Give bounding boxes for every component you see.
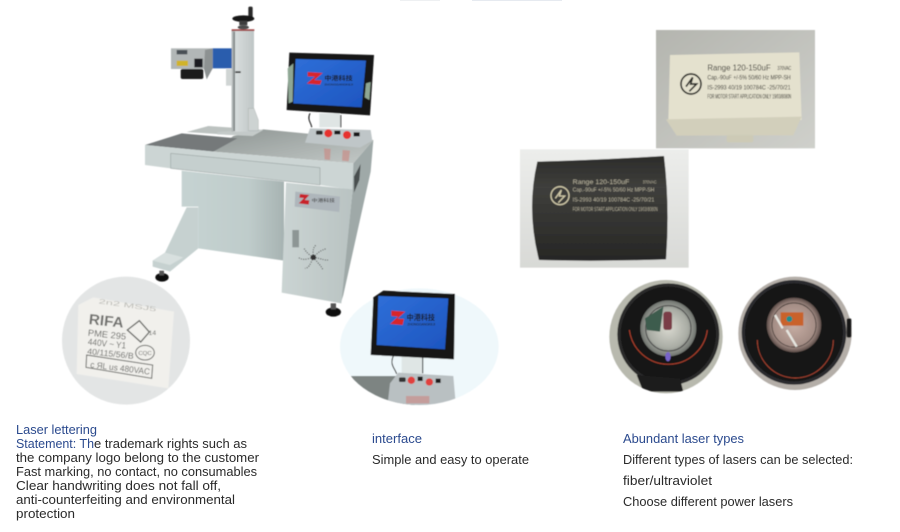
machine legs and lower body [153,171,341,317]
laser head [171,48,232,79]
feature: clear handwriting: Clear handwriting does not fall off, [16,478,221,493]
photo: beige capacitor with marking: Cap.-90uF +/-5% 50/60 Hz MPP-SH [707,75,791,81]
monitor: 中港科技 [324,74,353,82]
circular photo: interface close-up: 中港科技 [407,313,436,322]
photo: black capacitor with marking: 370VAC [643,179,657,184]
statement blue part: Statement: Th [16,436,94,451]
description: interface: Simple and easy to operate [372,452,529,467]
photo: black capacitor with marking [520,149,689,268]
circular photo: RIFA capacitor: PME 295 [87,328,127,342]
circular photo: RIFA capacitor: 2n2 MSJ5 [98,298,157,314]
photo: laser lens 2 [738,277,852,390]
cabinet logo plate: 中港科技 [312,197,335,204]
circular photo: RIFA capacitor: 440V ~ Y1 [87,337,127,351]
heading: laser lettering: Laser lettering [16,422,97,437]
photo: laser lens 1 [609,280,723,393]
photo: black capacitor with marking: Cap.-90uF +/-5% 50/60 Hz MPP-SH [573,187,654,193]
description: laser selection: Different types of lasers can be selected: [623,452,853,467]
photo: beige capacitor with marking: IS-2993 40/19 100784C -25/70/21 [707,85,791,91]
text block: interface [372,431,529,467]
description: laser kinds: fiber/ultraviolet [623,473,712,488]
handwheel [232,7,254,29]
heading: interface: interface [372,431,422,446]
photo: beige capacitor with marking: 370VAC [777,66,791,72]
feature: protection: protection [16,506,75,521]
photo: black capacitor with marking: Range 120-150uF [573,179,629,186]
vent [298,245,329,269]
control panel [305,128,372,148]
photo: beige capacitor with marking [656,30,815,148]
circular photo: interface close-up [340,288,499,410]
faint top edge marks [400,0,562,1]
circular photo: RIFA capacitor: 14 [149,330,156,337]
cabinet [282,140,373,303]
feature: anti-counterfeiting: anti-counterfeiting and environmental [16,492,235,507]
photo: black capacitor with marking: FOR MOTOR START APPLICATION ONLY 19/03/8080N [573,207,658,213]
machine: laser marking workstation [145,7,374,317]
photo: black capacitor with marking: IS-2993 40/19 100784C -25/70/21 [573,197,654,203]
text block: abundant laser types [623,431,853,509]
circular photo: RIFA capacitor [62,277,190,405]
statement line two: the company logo belong to the customer [16,450,260,465]
photo: beige capacitor with marking: Range 120-150uF [707,64,771,73]
circular photo: RIFA capacitor: c ЯL us 480VAC [90,359,151,377]
description: power options: Choose different power lasers [623,494,793,509]
cabinet logo plate [295,192,340,212]
statement black part: e trademark rights such as [94,436,247,451]
circular photo: RIFA capacitor: 40/115/56/B [87,346,135,361]
feature: fast marking: Fast marking, no contact, no consumables [16,464,257,479]
table top [145,126,373,190]
column [217,29,263,136]
monitor: ZHONGGANGKEJI [324,82,353,86]
photo: beige capacitor with marking: FOR MOTOR START APPLICATION ONLY 19/03/8080N [707,94,791,100]
circular photo: interface close-up: ZHONGGANGKEJI [407,323,435,327]
text block: laser lettering [16,422,260,521]
heading: abundant laser types: Abundant laser types [623,431,744,446]
monitor [287,53,374,127]
circular photo: RIFA capacitor: CQC [138,351,152,357]
circular photo: RIFA capacitor: RIFA [88,312,125,332]
